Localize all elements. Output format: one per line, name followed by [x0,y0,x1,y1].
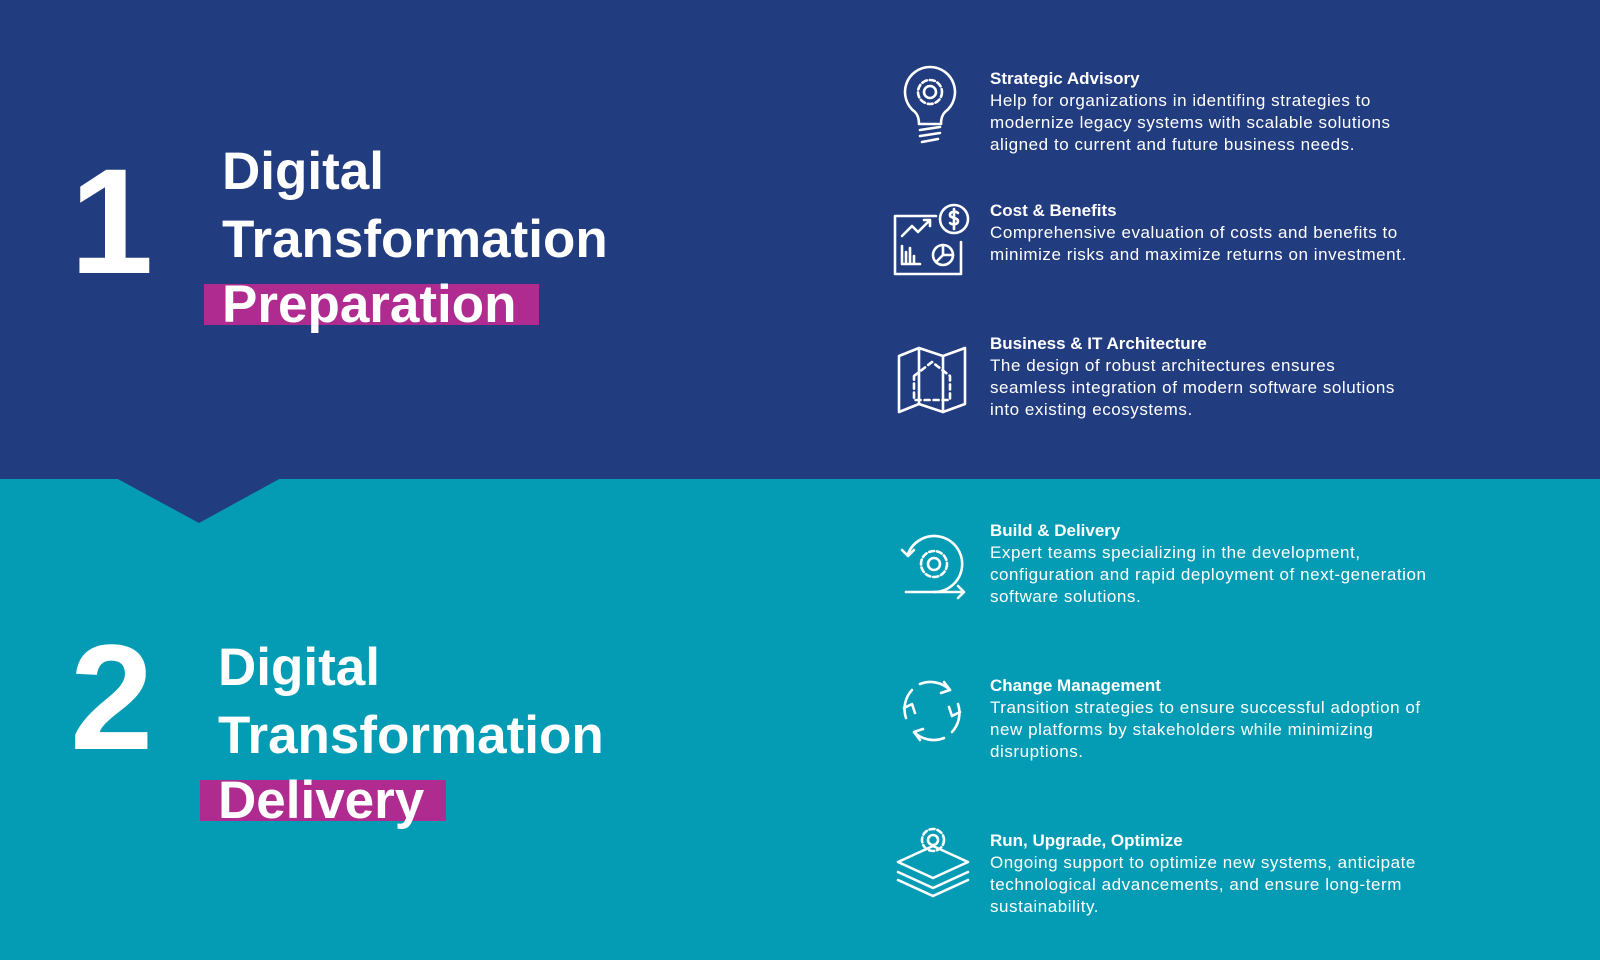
item: Cost & Benefits: Cost & Benefits [990,201,1117,220]
heading: Digital Transformation Preparation: Digital [222,142,384,201]
item: Build & Delivery: Expert teams specializing in the development, configuration and rapid deployment of next-generation software solutions. [990,543,1426,606]
icon: lightbulb gear [904,66,956,144]
number 1: 1 [70,137,153,305]
icon: build delivery [900,534,966,600]
icon: map architecture [898,346,966,414]
heading: Digital Transformation Delivery: Delivery [218,771,424,830]
panel: preparation background [0,0,1600,479]
item: Build & Delivery: Build & Delivery [990,521,1120,540]
item: Run, Upgrade, Optimize: Ongoing support to optimize new systems, anticipate technological advancements, and ensure long-term sustainability. [990,853,1416,916]
heading: Digital Transformation Delivery: Digital [218,638,380,697]
item: Business & IT Architecture: The design of robust architectures ensures [990,356,1335,375]
arrow: chevron [118,479,279,523]
heading: Digital Transformation Delivery: Transformation [218,706,604,765]
item: Cost & Benefits: Comprehensive evaluation of costs and benefits to minimize risks and maximize returns on investment. [990,223,1407,264]
item: Run, Upgrade, Optimize: Run, Upgrade, Optimize [990,831,1183,850]
item: Business & IT Architecture [990,334,1395,419]
number 2: 2 [70,613,153,781]
heading: Digital Transformation Preparation: Preparation [222,275,517,334]
icon: cost chart [894,204,970,276]
heading: Digital Transformation Delivery [200,638,604,830]
icon: change cycle [902,680,962,742]
heading: Digital Transformation Preparation [204,142,608,334]
heading: Digital Transformation Preparation: Transformation [222,210,608,269]
item: Business & IT Architecture: into existing ecosystems. [990,400,1193,419]
item: Cost & Benefits [990,201,1407,264]
item: Change Management: Change Management [990,676,1161,695]
item: Business & IT Architecture: seamless integration of modern software solutions [990,378,1395,397]
item: Business & IT Architecture: Business & IT Architecture [990,334,1207,353]
icon: layers gear [896,828,970,898]
item: Strategic Advisory: Strategic Advisory [990,69,1140,88]
item: Change Management: Transition strategies to ensure successful adoption of new platforms by stakeholders while minimizing disruptions. [990,698,1421,761]
item: Strategic Advisory: Help for organizations in identifing strategies to modernize legacy systems with scalable solutions aligned to current and future business needs. [990,91,1391,154]
